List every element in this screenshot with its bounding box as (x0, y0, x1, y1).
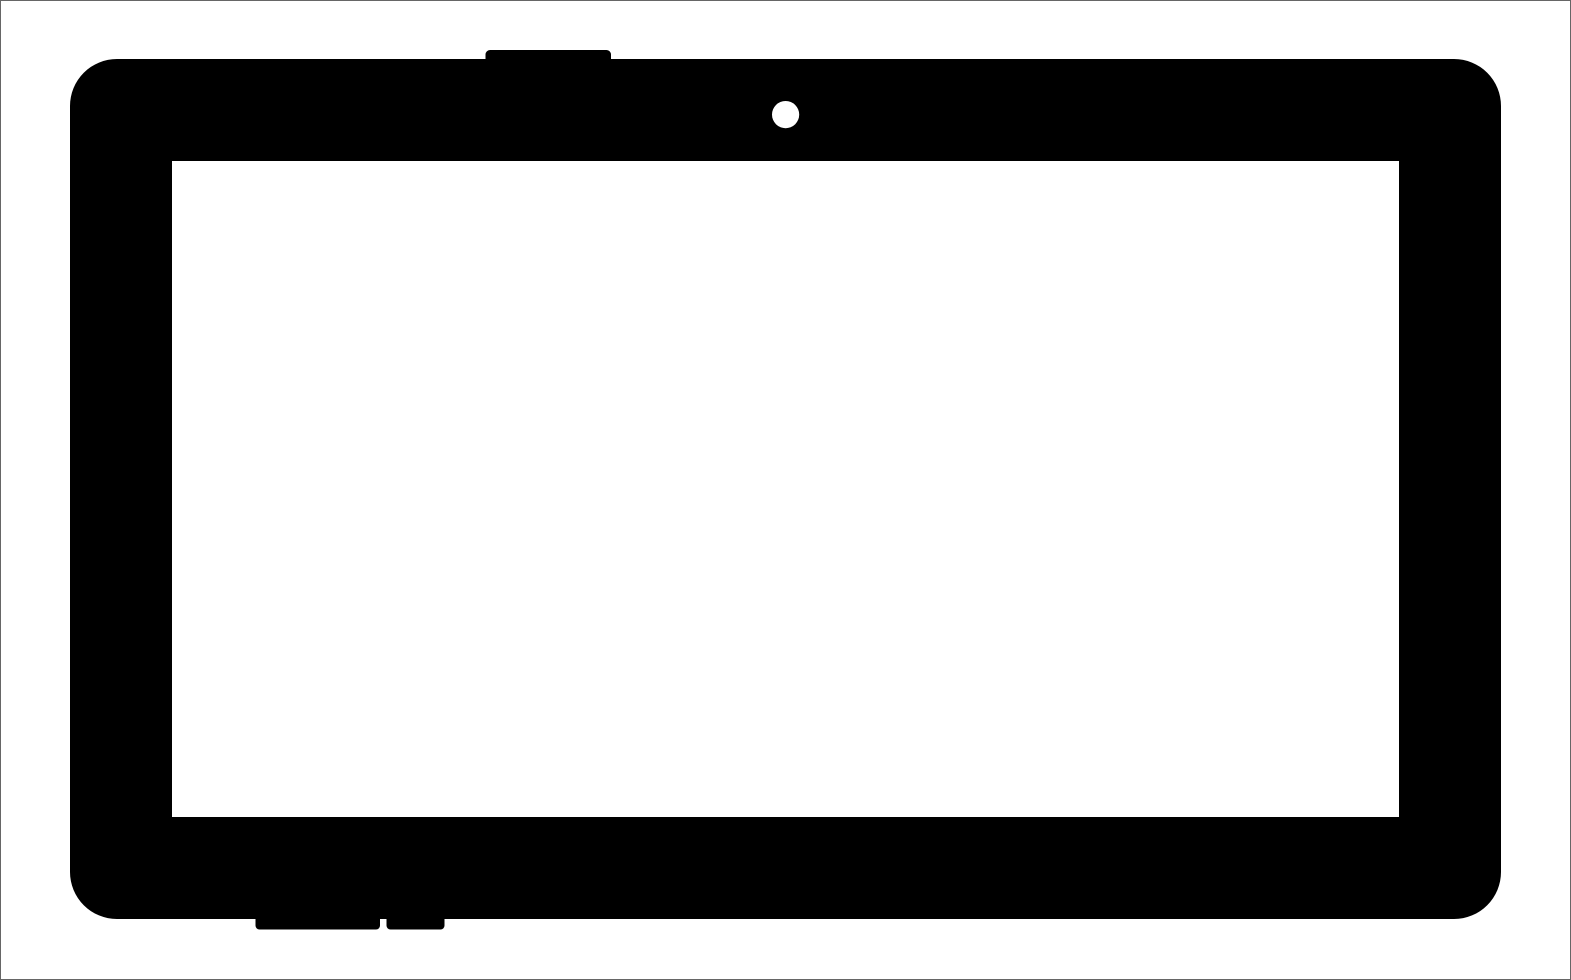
tablet bezel (70, 59, 1501, 919)
top button (486, 50, 611, 62)
bottom right port (386, 915, 444, 930)
camera (772, 101, 799, 128)
bottom left port (256, 915, 380, 930)
screen (172, 161, 1399, 817)
